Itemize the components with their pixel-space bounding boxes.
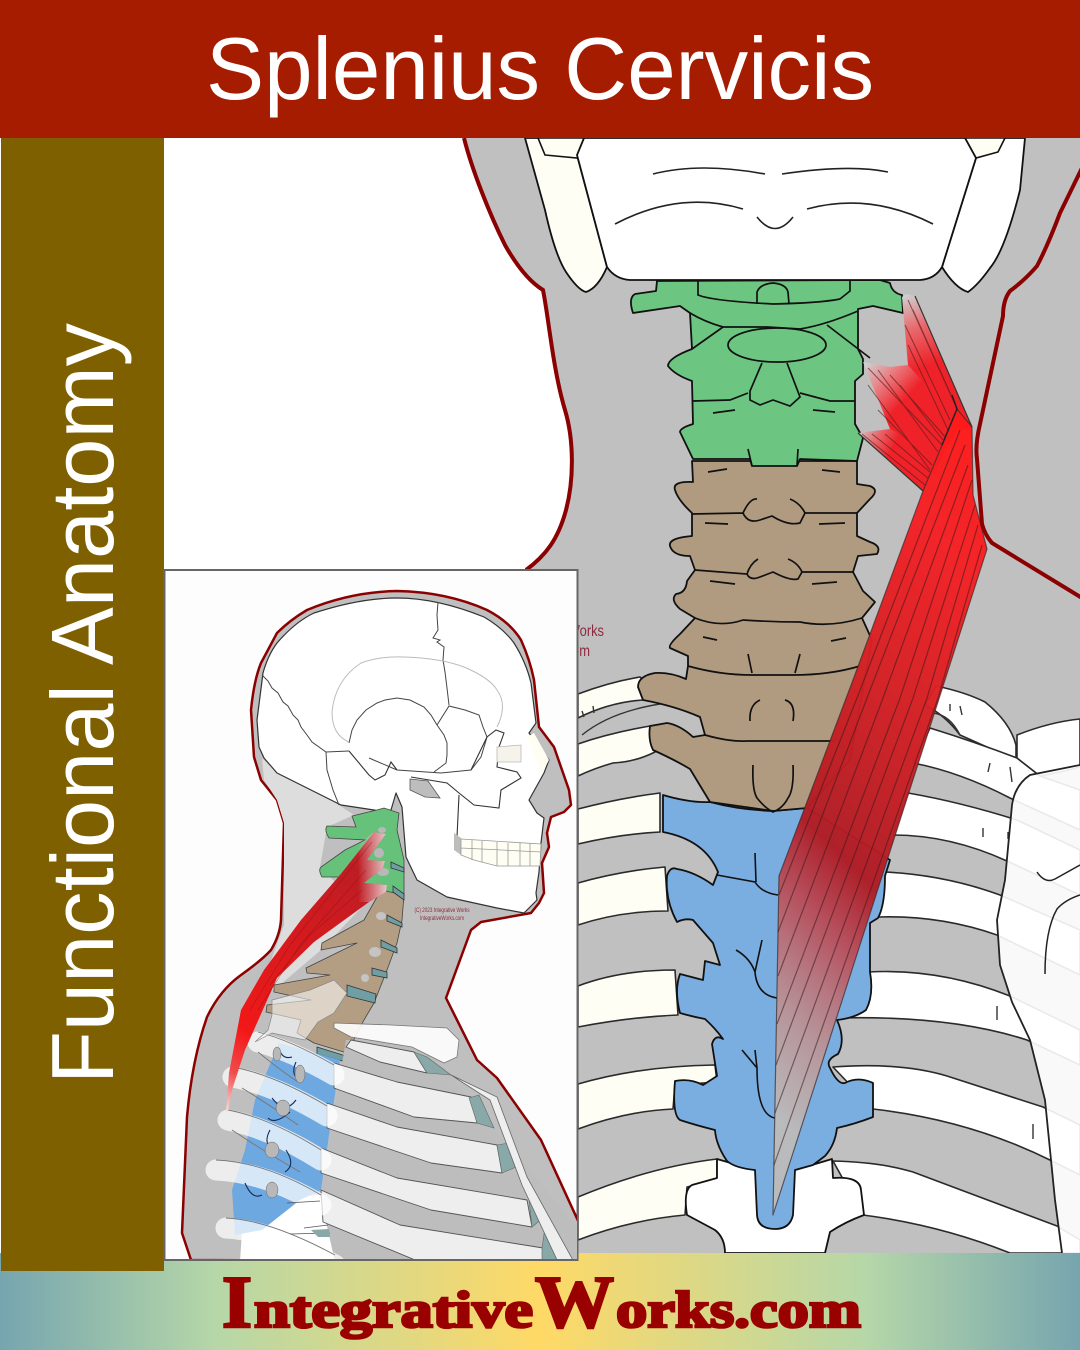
lower white vertebra (686, 1159, 864, 1253)
temporal line (332, 657, 502, 742)
ribs left (578, 677, 717, 1240)
left shoulder lines (582, 704, 660, 735)
title text: Splenius Cervicis (206, 19, 874, 118)
orbit (497, 745, 521, 762)
thoracic vertebrae blue (663, 795, 890, 1229)
ribs right (833, 686, 1080, 1253)
inset watermark: (C) 2023 Integrative Works (414, 908, 470, 914)
side banner (1, 138, 164, 1271)
body silhouette (400, 138, 1080, 1253)
muscle slips (902, 294, 970, 425)
muscle slip fibres (862, 300, 960, 485)
skull sutures (262, 602, 487, 805)
condyle (410, 779, 440, 798)
inset articular patches (265, 1047, 305, 1198)
scapula overlay (997, 765, 1080, 1253)
jaw shadow (454, 833, 461, 855)
upper cervical vertebrae green (631, 280, 903, 466)
inset grey foramina (374, 827, 389, 876)
green vertebra details (690, 281, 870, 466)
left jaw notch (538, 138, 585, 158)
cervical vertebrae brown (638, 461, 878, 811)
muscle slip edge (858, 296, 972, 491)
inset rib bands (321, 1040, 545, 1262)
title banner (0, 0, 1080, 138)
muscle belly fibres (774, 430, 982, 1165)
hidden watermark fragments: Integrative Works (504, 623, 604, 640)
rib ticks (933, 704, 1033, 1139)
facial bones (349, 730, 521, 837)
neck outline right (976, 168, 1080, 598)
jaw (525, 138, 1025, 292)
footer gradient band (0, 1253, 1080, 1350)
inset green vertebrae (320, 808, 404, 895)
hidden watermark fragments (578, 624, 604, 656)
main muscle belly (773, 409, 987, 1215)
main posterior neck illustration (400, 138, 1080, 1253)
hidden watermark fragments: .com (562, 643, 590, 660)
footer brand text: W (535, 1262, 614, 1344)
inset rib loop edges (216, 1032, 335, 1255)
inset brown vertebrae (266, 890, 404, 1053)
mandible lines (615, 168, 933, 228)
inset discs (317, 862, 404, 1062)
cervical vertebra details (688, 469, 862, 812)
inset rib cartilage (414, 1052, 561, 1262)
inset muscle fibres (250, 842, 372, 1010)
nasal bone (527, 733, 549, 773)
inset posterior rib loops (216, 1042, 335, 1265)
inset muscle tip fade (358, 832, 387, 902)
skull (257, 598, 549, 913)
inset grey ribcage background (321, 1040, 580, 1262)
inset light neck area (262, 758, 361, 990)
inset lower rib lines (287, 1201, 330, 1234)
inset thoracic vertebrae (232, 1043, 340, 1235)
inset sternal margin (451, 1075, 574, 1262)
thoracic vertebra details (717, 853, 778, 1118)
inset clavicle (334, 1023, 459, 1063)
right jaw notch (965, 138, 1005, 158)
left jaw bone (525, 138, 607, 292)
inset lower region (240, 1195, 335, 1262)
mandible body (577, 138, 976, 280)
inset watermark: IntegrativeWorks.com (420, 916, 464, 922)
inset body silhouette (182, 591, 580, 1262)
side banner text: Functional Anatomy (33, 323, 132, 1084)
inset lower cartilage (311, 1229, 330, 1237)
footer brand text: ntegrative (254, 1282, 533, 1339)
muscle overlap mark (942, 395, 957, 445)
footer brand text: I (222, 1262, 252, 1344)
teeth (461, 839, 541, 866)
clavicle (1017, 719, 1080, 776)
inset scapular blob (255, 980, 347, 1042)
inset muscle (226, 832, 387, 1112)
inset watermark (414, 908, 470, 922)
inset spinal details (245, 1048, 300, 1196)
inset grey foramina lower (361, 912, 386, 982)
neck outline (464, 138, 572, 570)
muscle: splenius cervicis (773, 294, 987, 1215)
right jaw bone (942, 138, 1025, 292)
footer brand text: orks.com (616, 1282, 861, 1339)
inset panel: lateral view (164, 570, 580, 1265)
